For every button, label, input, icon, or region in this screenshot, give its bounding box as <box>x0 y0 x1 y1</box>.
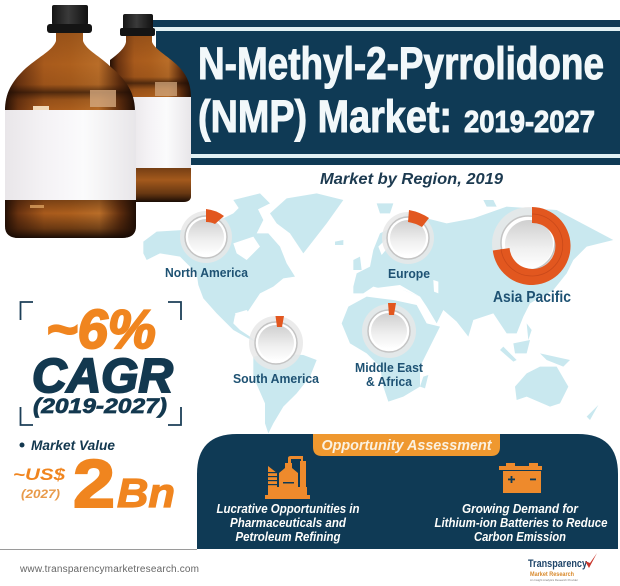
title text: 2019-2027 <box>464 104 595 139</box>
label: europe: Europe <box>388 267 430 281</box>
footer website: www.transparencymarketresearch.com <box>19 564 199 575</box>
text: lucrative opportunities: Petroleum Refining <box>236 530 341 544</box>
label: middle east and africa <box>355 361 424 389</box>
cagr figure: CAGR <box>32 350 173 403</box>
title banner <box>153 20 620 165</box>
label: south america: South America <box>233 372 320 386</box>
panel: opportunity assessment <box>197 434 618 549</box>
donut: asia pacific <box>492 207 571 285</box>
icon: refinery <box>265 456 310 499</box>
text: growing demand: Lithium-ion Batteries to Reduce <box>434 516 608 530</box>
text: lucrative opportunities: Lucrative Opportunities in <box>216 502 360 516</box>
donut: north america <box>180 209 232 263</box>
donut: south america <box>249 316 303 370</box>
label: north america: North America <box>165 266 249 280</box>
cagr brackets <box>20 302 181 425</box>
donut: europe <box>382 210 434 264</box>
title text <box>198 38 604 142</box>
cagr figure: (2019-2027) <box>33 395 167 418</box>
world map <box>143 193 613 433</box>
title text: (NMP) Market: <box>198 91 452 142</box>
market value <box>13 437 175 522</box>
back bottle <box>110 14 191 202</box>
text: lucrative opportunities <box>216 502 360 544</box>
logo: Market Research <box>530 571 574 578</box>
front bottle <box>5 5 136 238</box>
cagr figure: ~6% <box>46 298 156 360</box>
text: growing demand <box>434 502 608 544</box>
label: middle east and africa: Middle East <box>355 361 424 375</box>
logo: An Insight Analytics Research Provider <box>530 578 578 582</box>
white map details <box>233 232 438 330</box>
heading: market by region: Market by Region, 2019 <box>320 171 503 188</box>
text: growing demand: Growing Demand for <box>462 502 579 516</box>
text: growing demand: Carbon Emission <box>474 530 566 544</box>
logo: Transparency <box>528 558 588 570</box>
market value figure <box>13 446 175 522</box>
donut: middle east and africa <box>362 303 416 358</box>
label: asia pacific: Asia Pacific <box>493 289 571 306</box>
label: middle east and africa: & Africa <box>366 375 413 389</box>
market value figure: Bn <box>117 470 175 516</box>
heading pill: Opportunity Assessment <box>322 437 492 454</box>
market value: Market Value <box>31 437 115 453</box>
market value figure: 2 <box>73 446 115 522</box>
cagr figure <box>32 298 173 418</box>
text: lucrative opportunities: Pharmaceuticals and <box>230 516 346 530</box>
market value figure: ~US$ <box>13 465 66 484</box>
logo <box>528 553 597 582</box>
icon: battery <box>499 463 542 493</box>
market value figure: (2027) <box>21 489 60 501</box>
